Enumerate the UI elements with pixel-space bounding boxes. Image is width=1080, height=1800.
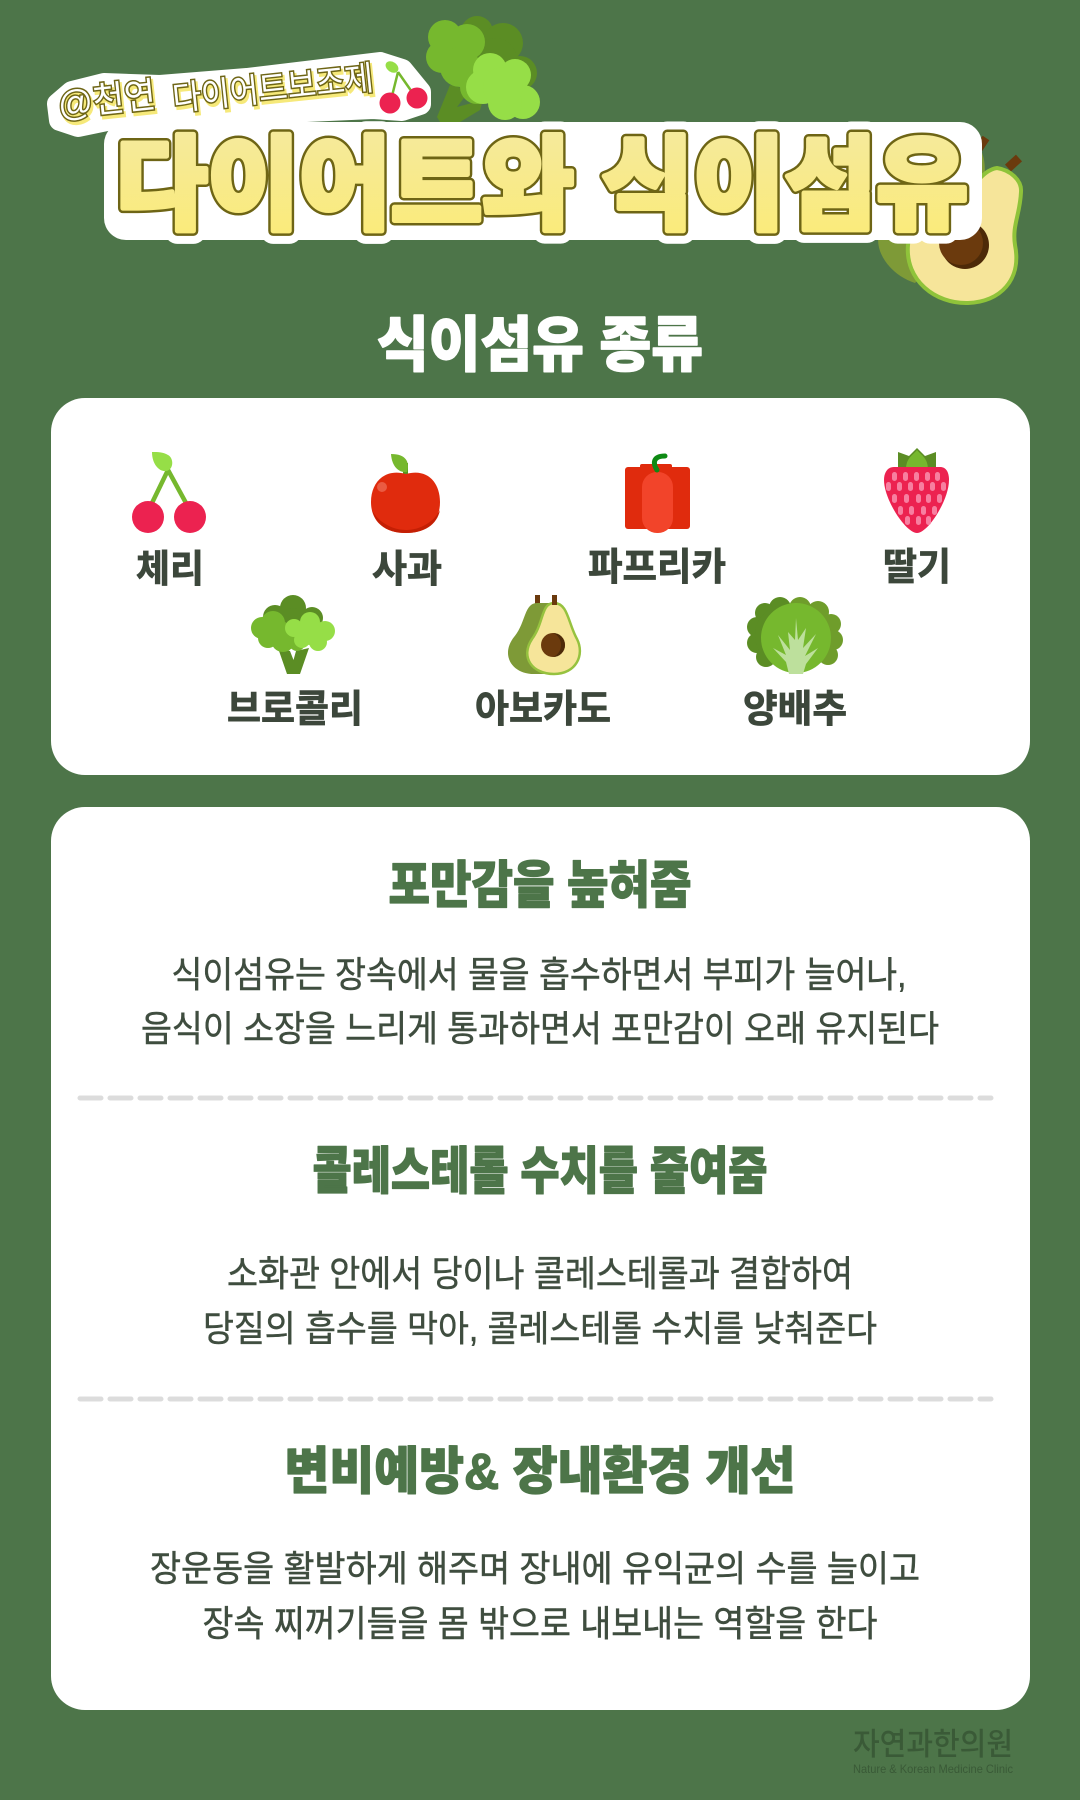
main title: 다이어트와 식이섬유: [116, 129, 968, 243]
icon: cherry: [132, 452, 206, 533]
label: paprika: 파프리카: [588, 547, 726, 589]
icon: badge cherries: [380, 59, 428, 114]
benefit 3 text: 장속 찌꺼기들을 몸 밖으로 내보내는 역할을 한다: [202, 1603, 878, 1644]
subtitle shadow right: 다이어트보조제: [173, 63, 377, 121]
benefit 3 text: 장운동을 활발하게 해주며 장내에 유익균의 수를 늘이고: [150, 1548, 920, 1589]
icon: apple: [371, 454, 440, 533]
panel: fiber food types: [51, 398, 1030, 775]
main title: 다이어트와 식이섬유: [116, 129, 968, 243]
icon: paprika: [625, 456, 690, 533]
label: broccoli: 브로콜리: [227, 689, 363, 731]
clinic logo: [853, 1727, 1013, 1776]
subtitle text right: 다이어트보조제: [171, 60, 375, 118]
label: avocado: 아보카도: [475, 689, 611, 731]
panel: fiber benefits: [51, 807, 1030, 1710]
benefit 2 heading: 콜레스테롤 수치를 줄여줌: [312, 1143, 768, 1200]
subtitle shadow left: @천연: [58, 77, 160, 128]
label: cabbage: 양배추: [743, 689, 847, 731]
benefit 1 heading: 포만감을 높혀줌: [388, 857, 692, 914]
benefit 3 text: [150, 1548, 920, 1644]
clinic logo: Nature & Korean Medicine Clinic: [853, 1762, 1013, 1776]
icon: header avocado: [878, 138, 1021, 303]
label: apple: 사과: [372, 549, 442, 591]
clinic logo: 자연과한의원: [853, 1727, 1013, 1762]
section heading: 식이섬유 종류: [377, 312, 703, 379]
benefit 1 text: [141, 954, 939, 1049]
benefit 2 text: [203, 1253, 877, 1349]
benefit 3 heading: 변비예방& 장내환경 개선: [284, 1443, 796, 1500]
label: strawberry: 딸기: [883, 547, 951, 589]
icon: avocado: [508, 595, 580, 674]
benefit 2 text: 소화관 안에서 당이나 콜레스테롤과 결합하여: [227, 1253, 853, 1294]
icon: header broccoli: [426, 16, 540, 122]
icon: cabbage: [747, 597, 843, 674]
label: cherry: 체리: [136, 549, 204, 591]
icon: broccoli: [251, 595, 335, 674]
main title: 다이어트와 식이섬유: [116, 129, 968, 243]
benefit 1 text: 음식이 소장을 느리게 통과하면서 포만감이 오래 유지된다: [141, 1008, 939, 1049]
icon: strawberry: [884, 448, 949, 533]
subtitle badge: [56, 59, 427, 128]
subtitle text left: @천연: [56, 74, 158, 125]
benefit 2 text: 당질의 흡수를 막아, 콜레스테롤 수치를 낮춰준다: [203, 1308, 877, 1349]
benefit 1 text: 식이섬유는 장속에서 물을 흡수하면서 부피가 늘어나,: [172, 954, 906, 995]
